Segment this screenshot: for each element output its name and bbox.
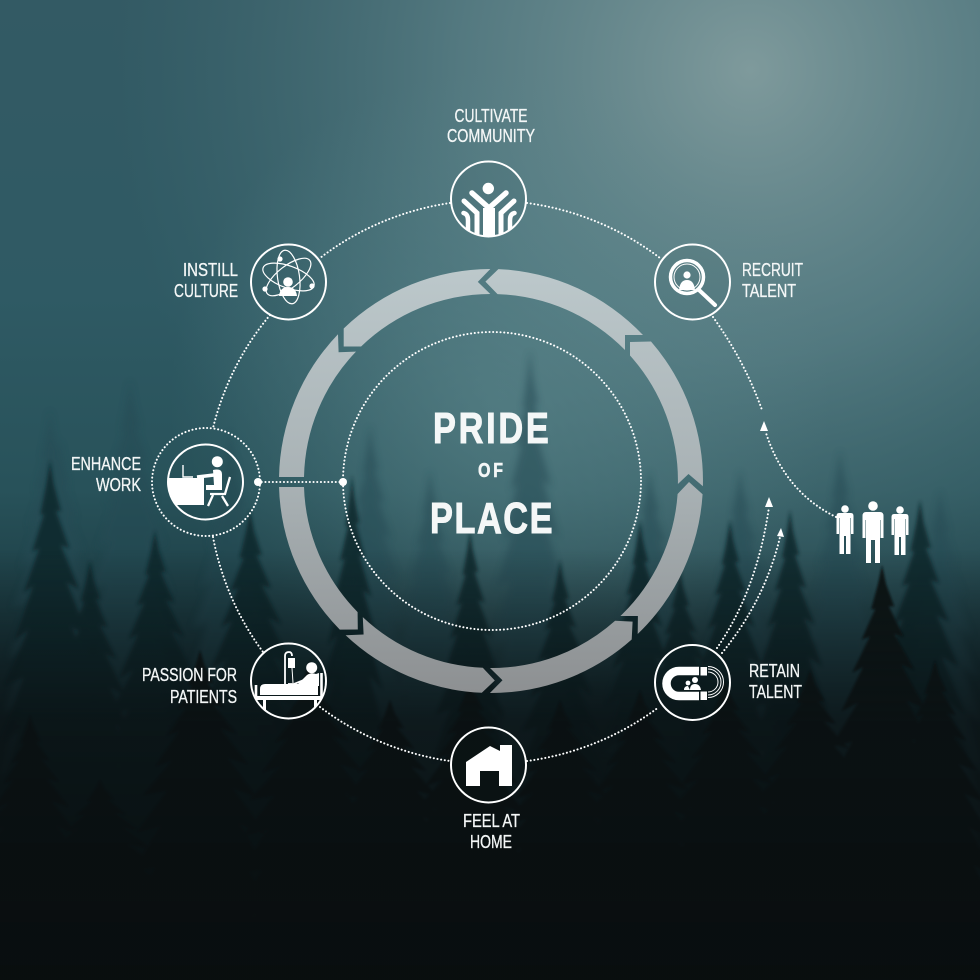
label: cultivate community: CULTIVATE — [454, 106, 528, 126]
label: passion for patients: PASSION FOR — [142, 665, 237, 685]
central segmented ring of arrows — [279, 269, 703, 693]
node: instill culture — [251, 244, 326, 320]
label: cultivate community — [447, 106, 535, 146]
node: feel at home — [451, 728, 526, 802]
label: recruit talent — [742, 260, 803, 301]
label: instill culture: CULTURE — [174, 281, 238, 301]
label: cultivate community: COMMUNITY — [447, 126, 535, 146]
label: feel at home: FEEL AT — [463, 811, 520, 831]
icon: community figure — [464, 183, 514, 240]
title: pride of place: PLACE — [430, 494, 554, 543]
node: passion for patients — [251, 644, 326, 718]
label: instill culture — [174, 260, 238, 301]
title: pride of place: PRIDE — [433, 404, 551, 453]
label: instill culture: INSTILL — [183, 260, 238, 280]
label: passion for patients — [142, 665, 237, 707]
outer dotted orbit connectors — [213, 203, 762, 761]
icon: person at desk — [160, 456, 230, 506]
inner dotted circle — [343, 332, 641, 630]
node: retain talent — [655, 645, 730, 720]
node: cultivate community — [451, 162, 526, 240]
background: misty forest — [0, 0, 980, 744]
node: enhance work — [160, 444, 243, 520]
label: retain talent: RETAIN — [749, 661, 800, 681]
label: recruit talent: RECRUIT — [742, 260, 803, 280]
label: enhance work: WORK — [96, 475, 141, 495]
connector from enhance work to inner circle — [152, 428, 347, 536]
label: recruit talent: TALENT — [742, 281, 796, 301]
title: pride of place: OF — [478, 459, 506, 481]
label: enhance work — [71, 454, 141, 495]
icon: house — [466, 745, 512, 786]
label: feel at home: HOME — [470, 832, 512, 852]
label: retain talent — [749, 661, 802, 702]
icon: group of three people — [836, 501, 908, 563]
arrow: people to recruit talent — [760, 421, 836, 517]
icon: atom with person — [259, 249, 318, 305]
arrow: retain talent upward one — [717, 497, 773, 648]
icon: magnet with people — [666, 666, 724, 700]
node: recruit talent — [655, 244, 730, 320]
label: passion for patients: PATIENTS — [170, 687, 237, 707]
arrow: retain talent upward two — [722, 528, 784, 653]
label: feel at home — [463, 811, 520, 852]
title: pride of place — [430, 404, 554, 543]
label: retain talent: TALENT — [749, 682, 802, 702]
icon: patient in bed — [256, 652, 322, 715]
icon: magnifier with person — [670, 260, 715, 305]
label: enhance work: ENHANCE — [71, 454, 141, 474]
